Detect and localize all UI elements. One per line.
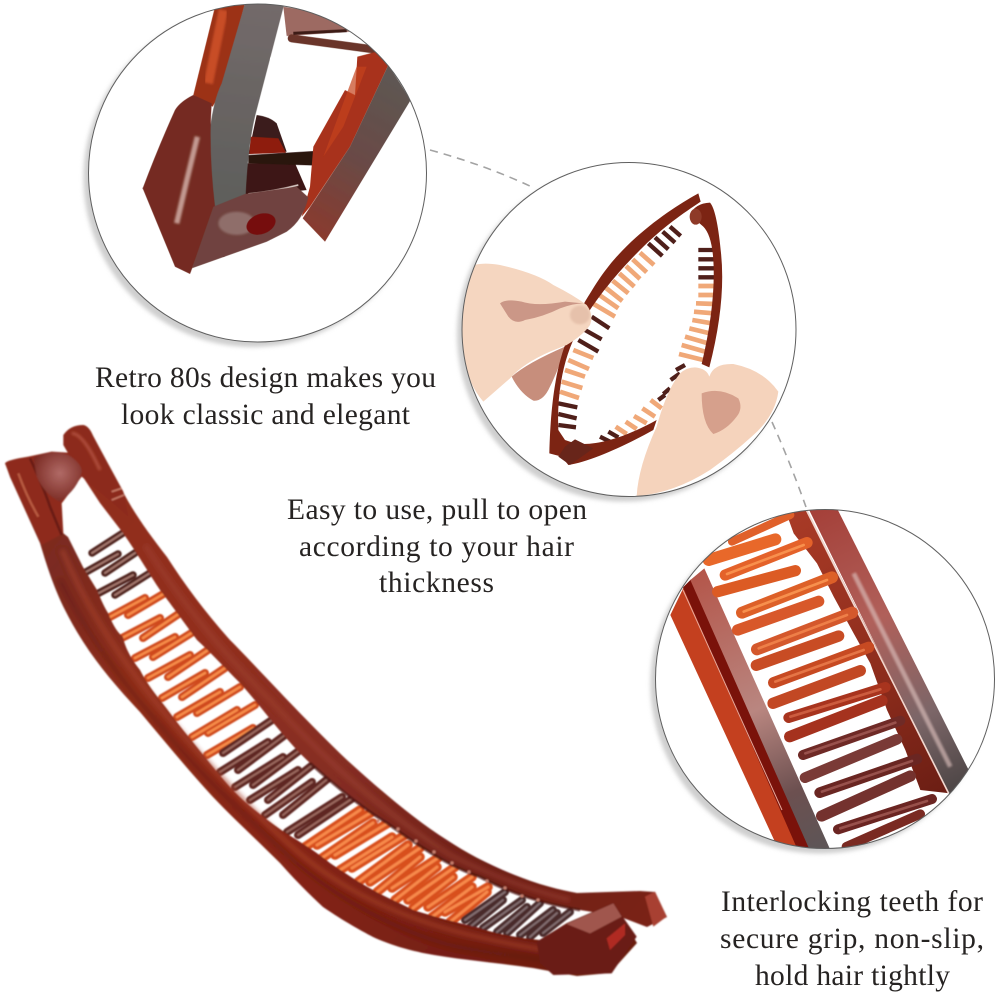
dark socket behind hinge	[245, 115, 321, 197]
hinge head front face	[190, 187, 308, 274]
circle background	[88, 4, 426, 342]
highlight along back band	[854, 573, 950, 767]
dark fold beside knob	[30, 458, 62, 535]
right hand	[637, 364, 778, 496]
pin hole	[246, 213, 276, 235]
upper post	[63, 425, 128, 517]
left hand rear fingers	[512, 347, 565, 401]
dashed connector: second circle to third circle	[772, 422, 806, 507]
slot in plate	[18, 473, 38, 517]
highlight on post	[72, 433, 100, 470]
dark inner edge of back band	[310, 763, 580, 910]
teeth: upper orange group	[110, 593, 255, 755]
hinge head side face	[143, 95, 215, 274]
dashed connector: first circle to second circle	[430, 150, 534, 188]
teeth at top of hinge	[283, 7, 373, 49]
specular highlights on teeth	[727, 545, 927, 828]
left dark red band	[683, 579, 812, 850]
left arm grey face	[209, 3, 284, 208]
thin highlight on left band	[683, 590, 782, 810]
foot top face	[567, 903, 622, 933]
right hand shadow in palm	[702, 391, 740, 434]
clip foot: socket end	[537, 892, 667, 975]
photo: hands pulling clip open	[461, 193, 778, 496]
teeth: middle dark group	[220, 720, 353, 835]
red streak on left arm	[208, 10, 223, 83]
caption: easy to use: according to your hair	[299, 531, 574, 563]
left arm red face	[193, 3, 245, 107]
clip right arm	[690, 203, 722, 367]
notches at tooth roots	[376, 819, 540, 902]
teeth: end grey-brown group	[465, 892, 570, 937]
dark crease along front band	[60, 580, 545, 960]
caption: interlocking teeth: secure grip, non-slip,	[720, 923, 984, 955]
panel: hands opening the clip circle	[457, 162, 796, 502]
dark brown teeth	[803, 721, 932, 847]
circle outline	[88, 4, 426, 342]
thin white line along back band	[806, 510, 949, 793]
left outer red band	[670, 587, 804, 848]
hinge knob	[33, 453, 82, 502]
red-brown teeth	[773, 671, 885, 737]
caption: retro design: look classic and elegant	[121, 399, 411, 431]
left thumb tip shading	[570, 306, 590, 324]
circle drop shadow	[457, 168, 791, 502]
clip frame	[549, 193, 701, 465]
front band of clip	[5, 463, 637, 976]
caption: retro design: Retro 80s design makes you	[95, 362, 436, 394]
clip hinge knob	[690, 209, 702, 225]
teeth: lower orange group	[305, 810, 488, 922]
left hand	[461, 264, 591, 402]
caption: retro design	[95, 362, 436, 431]
left hand shadow between fingers	[500, 300, 583, 322]
sheen on head front face	[218, 212, 255, 235]
clip teeth dark	[558, 227, 715, 442]
foot body	[537, 903, 637, 975]
foot socket opening	[607, 923, 625, 950]
orange teeth	[709, 515, 869, 683]
caption: interlocking teeth	[720, 886, 984, 992]
large banana clip photo	[5, 425, 667, 976]
circle background	[462, 162, 796, 496]
teeth: upper dark group	[86, 533, 150, 595]
hinge plate	[5, 452, 82, 545]
back arm tip face	[645, 892, 667, 927]
right back band	[808, 508, 969, 795]
panel: interlocking teeth close-up circle	[650, 508, 994, 854]
panel: hinge close-up circle	[84, 3, 426, 347]
circle outline	[656, 510, 994, 848]
right arm of clip	[302, 52, 411, 242]
photo: macro of interlocking teeth	[670, 508, 969, 850]
caption: easy to use: thickness	[379, 567, 494, 599]
ridge on post	[112, 488, 124, 500]
photo: hinge of the clip	[143, 3, 411, 274]
clip teeth peach	[560, 253, 715, 434]
circle outline	[462, 162, 796, 496]
back band of clip	[83, 430, 667, 927]
centre red column	[787, 508, 950, 793]
circle drop shadow	[84, 9, 422, 347]
left grey band	[690, 568, 830, 850]
highlight on head	[177, 137, 197, 223]
circle background	[656, 510, 994, 848]
caption: easy to use	[287, 494, 587, 599]
caption: interlocking teeth: hold hair tightly	[755, 960, 950, 992]
circle drop shadow	[650, 514, 990, 854]
clip foot	[558, 439, 593, 465]
sheen on back band	[145, 545, 570, 900]
clip head: hinge and knob	[5, 425, 128, 545]
caption: interlocking teeth: Interlocking teeth for	[721, 886, 983, 918]
sheen on front band	[62, 550, 560, 952]
caption: easy to use: Easy to use, pull to open	[287, 494, 587, 526]
